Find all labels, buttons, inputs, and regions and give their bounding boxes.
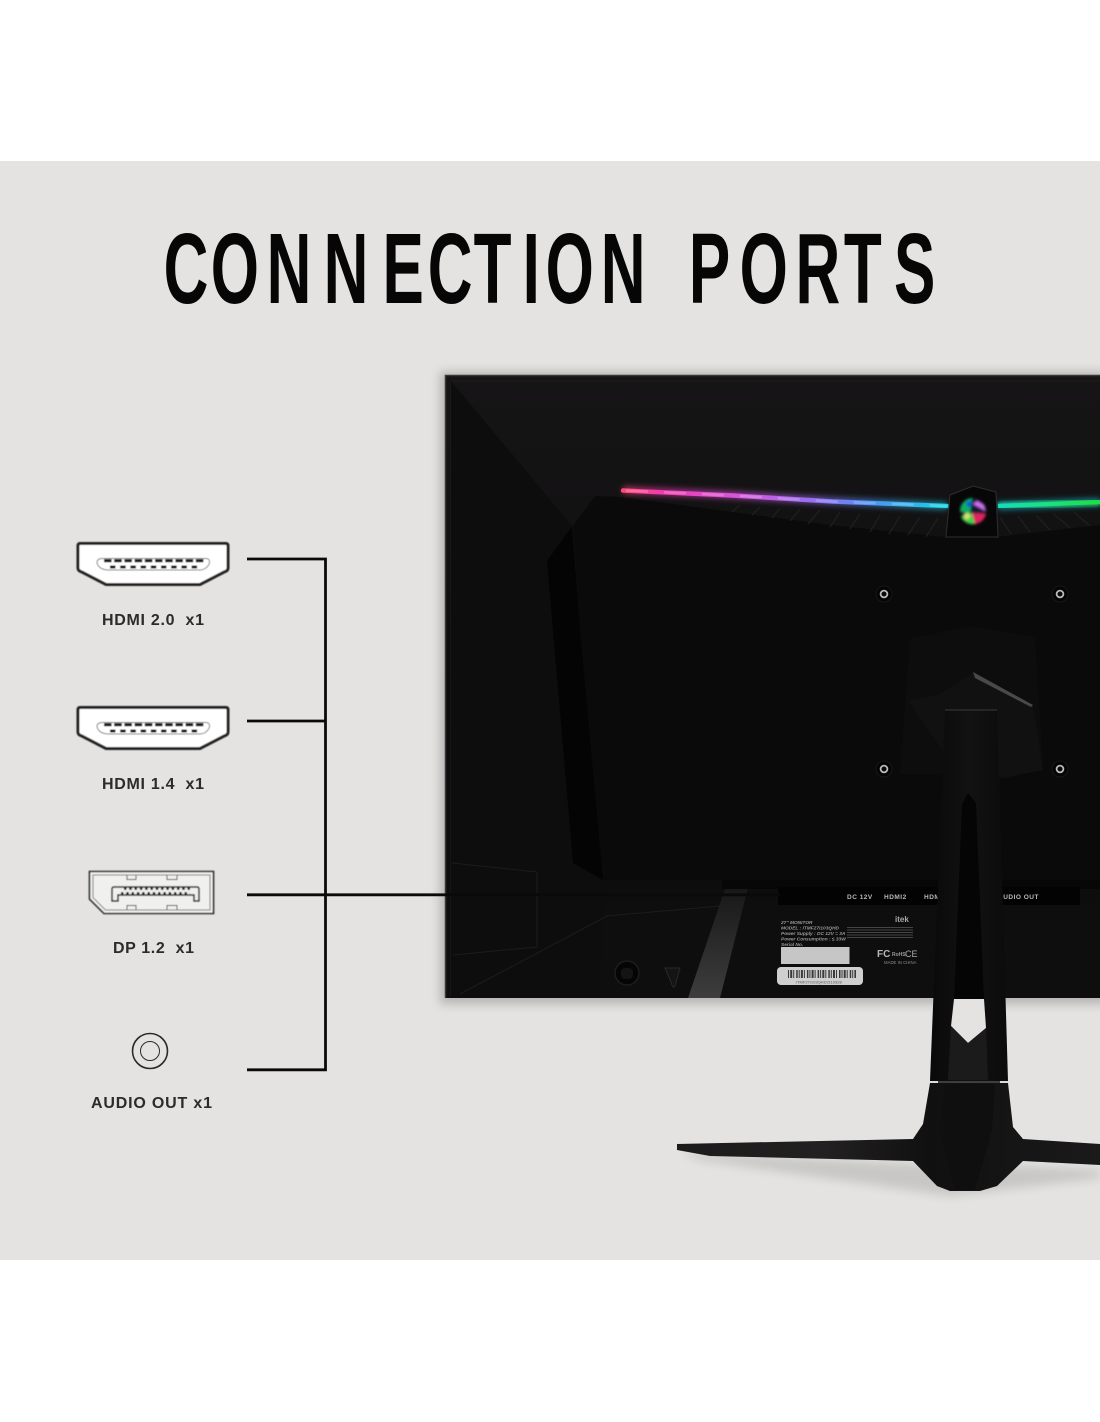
label: audio out: AUDIO OUT x1 — [91, 1095, 212, 1112]
stand bracket — [900, 626, 1043, 776]
label: HDMI 1.4: HDMI 1.4 x1 — [102, 776, 204, 793]
neck lower insert — [948, 1026, 988, 1080]
stand neck — [930, 710, 1008, 1081]
collar highlights — [930, 1081, 1008, 1083]
brand and compliance text: MADE IN CHINA — [884, 960, 917, 965]
foot front facet — [940, 1084, 995, 1190]
RGB LED strip right glow — [998, 502, 1100, 506]
rating label text: 27'' MONITOR — [780, 920, 813, 926]
neck top highlight — [945, 709, 997, 711]
lower facet lines — [452, 863, 720, 994]
left shell facet — [451, 381, 603, 998]
stand foot — [677, 1083, 1100, 1191]
port names: HDMI1 — [924, 894, 947, 901]
reflective bottom stripe — [688, 880, 750, 998]
icon: DisplayPort — [90, 872, 214, 914]
collar seam — [938, 1081, 1000, 1083]
title: CONNECTION PORTS — [164, 213, 935, 325]
neck slot upper — [954, 793, 984, 1000]
serial number box — [781, 947, 850, 964]
RGB LED strip left — [623, 490, 947, 506]
VESA screws — [876, 586, 1068, 777]
label: HDMI 2.0: HDMI 2.0 x1 — [102, 612, 204, 629]
RGB LED glow — [623, 490, 1100, 506]
icon: audio jack — [132, 1034, 168, 1068]
neck slot background — [951, 999, 986, 1043]
port names: DC 12V — [847, 894, 873, 901]
brand and compliance text: itek — [895, 915, 909, 924]
brand and compliance text — [847, 915, 918, 965]
monitor rear view — [440, 372, 1100, 1196]
lower back panel — [573, 496, 1100, 880]
brand and compliance text: CE — [905, 949, 918, 959]
monitor back shell — [445, 375, 1100, 998]
joystick button — [665, 968, 680, 988]
RGB logo orb — [960, 498, 986, 524]
icon: HDMI 1.4 port — [78, 708, 228, 748]
connector lines — [247, 559, 780, 1070]
brand and compliance text: RoHS — [892, 952, 906, 958]
rating label text: Power Supply : DC 12V = 3A — [781, 931, 846, 937]
port bay band — [722, 880, 1100, 889]
port icons and labels — [78, 544, 228, 1112]
vent fins — [732, 505, 1090, 537]
RGB LED strip right — [998, 502, 1100, 506]
grey background panel — [0, 161, 1100, 1260]
rating label text: Serial No. — [781, 942, 803, 948]
barcode sticker: ITMF27I103QHD2110328 — [796, 980, 843, 984]
LED segment highlights — [626, 490, 947, 506]
port names — [847, 894, 1039, 901]
port names: AUDIO OUT — [998, 894, 1039, 901]
port names: DP — [972, 894, 982, 901]
icon: HDMI 2.0 port — [78, 544, 228, 584]
barcode sticker — [777, 967, 863, 985]
brand and compliance text: FC — [877, 949, 890, 960]
rating label text: MODEL : ITMF27I103QHD — [781, 926, 840, 932]
port names: HDMI2 — [884, 894, 907, 901]
RGB logo housing — [946, 486, 998, 537]
rating label text — [780, 920, 846, 948]
rating label text: Power Consumption : ≤ 33W — [781, 936, 846, 942]
shell edge highlight — [446, 376, 1100, 998]
foot shadow — [680, 1152, 1100, 1196]
bracket edge highlight — [973, 672, 1033, 707]
monitor shadow — [440, 372, 1100, 1004]
power button — [615, 961, 639, 985]
panel side shadow — [547, 526, 603, 880]
port label bar — [778, 887, 1080, 905]
label: DP 1.2: DP 1.2 x1 — [113, 940, 194, 957]
bracket arm — [908, 673, 1043, 778]
